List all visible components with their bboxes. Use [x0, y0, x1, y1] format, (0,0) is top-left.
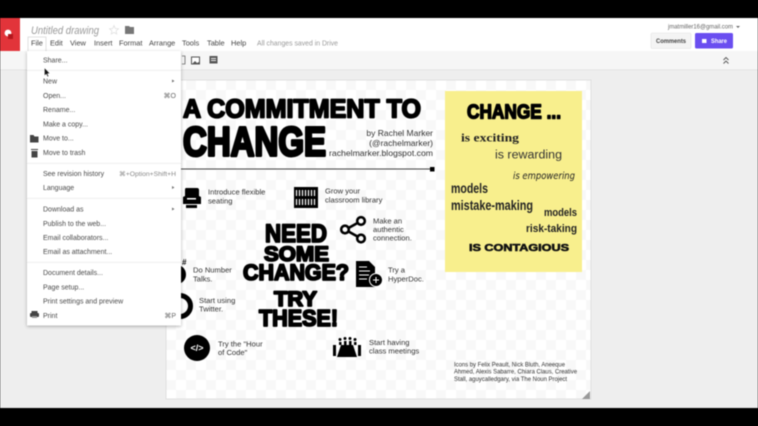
menu bar [28, 37, 338, 52]
panel: change is contagious: CHANGE ... [467, 102, 561, 124]
panel: change is contagious: is rewarding [495, 150, 562, 162]
title: A COMMITMENT TO [183, 96, 421, 124]
menu shortcuts: ⌘+Option+Shift+H [119, 170, 176, 178]
file dropdown menu: Document details... [43, 270, 103, 277]
item: twitter [170, 296, 235, 316]
item: flexible seating: seating [208, 196, 232, 206]
item: classroom library [294, 186, 383, 208]
menu bar: Edit [50, 38, 63, 48]
central heading: THESE! [259, 305, 338, 331]
share button: Share [711, 38, 727, 45]
file dropdown menu: Move to trash [43, 150, 86, 157]
item: flexible seating [183, 188, 265, 208]
title: CHANGE [183, 118, 326, 164]
menu bar: File [31, 38, 43, 48]
icon: image tool [192, 57, 200, 64]
icon: bookshelf [294, 187, 318, 208]
item: hyperdoc: HyperDoc. [388, 274, 424, 284]
icon: printer [30, 311, 39, 318]
byline: by Rachel Marker [366, 128, 433, 138]
menu bar: Format [119, 38, 142, 48]
menu shortcuts [119, 92, 177, 320]
item: classroom library: Grow your [325, 186, 360, 196]
item: number talks: Talks. [193, 274, 212, 284]
icon: comment tool [210, 56, 218, 64]
icon: share nodes [341, 217, 365, 242]
item: twitter: Start using [199, 296, 235, 305]
file dropdown menu: Open... [43, 93, 66, 100]
file dropdown menu: New [43, 78, 58, 86]
item: class meetings: Start having [369, 338, 410, 347]
item: hour of code: Try the "Hour [218, 340, 263, 348]
item: class meetings: class meetings [369, 346, 419, 356]
submenu arrows [172, 80, 174, 210]
icon: document plus [356, 261, 382, 287]
central heading [243, 220, 349, 331]
file dropdown menu: Download as [43, 206, 84, 214]
icon: star [109, 26, 118, 34]
app logo [0, 18, 20, 51]
file dropdown menu: Print settings and preview [43, 298, 124, 306]
icon: number talks: # [182, 258, 187, 267]
icon credits: Icons by Felix Peault, Nick Bluth, Aneeque [454, 361, 565, 368]
item: authentic connection [341, 216, 412, 242]
item: number talks: Do Number [193, 266, 232, 274]
item: authentic connection: authentic [373, 225, 404, 234]
item: number talks [168, 258, 232, 284]
document title: Untitled drawing [31, 25, 100, 37]
item: class meetings [333, 337, 419, 357]
file dropdown menu: Email as attachment... [43, 249, 112, 256]
menu bar: View [70, 38, 87, 48]
item: classroom library: classroom library [325, 196, 383, 204]
icon: twitter ring [170, 296, 190, 316]
panel: change is contagious: models [544, 207, 577, 219]
panel: change is contagious: mistake-making [451, 197, 533, 213]
central heading: TRY [274, 288, 317, 311]
icon: collapse chevrons [724, 58, 728, 64]
panel: change is contagious [445, 91, 582, 272]
drawing page [166, 80, 591, 399]
file dropdown menu: Print [43, 313, 57, 320]
file dropdown menu: Make a copy... [43, 122, 88, 128]
title [183, 96, 421, 164]
icon credits: Ahmed, Alexis Sabarre, Chiara Claus, Creative [454, 368, 577, 376]
account email: jmatmiller16@gmail.com [667, 24, 733, 30]
panel: change is contagious: risk-taking [526, 223, 577, 235]
item: hour of code [184, 335, 263, 361]
file dropdown menu: Rename... [43, 107, 75, 114]
bottom letterbox bar [0, 408, 758, 426]
panel: change is contagious: is empowering [513, 171, 575, 182]
icon credits [454, 361, 577, 383]
item: authentic connection: Make an [373, 216, 402, 226]
icon: folder [30, 135, 38, 142]
icon: trash [31, 149, 38, 158]
item: hour of code: of Code" [218, 348, 248, 357]
central heading: CHANGE? [243, 260, 349, 285]
central heading: SOME [264, 243, 329, 266]
menu bar: Help [231, 38, 246, 48]
menu bar: Arrange [149, 38, 175, 48]
mouse cursor [44, 68, 50, 77]
item: hyperdoc [356, 261, 424, 287]
file dropdown menu: Page setup... [43, 284, 84, 292]
app header [0, 18, 758, 52]
menu bar: Tools [182, 38, 200, 48]
editor background [0, 70, 758, 408]
panel: change is contagious: IS CONTAGIOUS [469, 243, 569, 254]
icon credits: Stall, aguycalledgary, via The Noun Project [454, 376, 567, 383]
file dropdown menu: See revision history [43, 171, 105, 178]
icon: folder [125, 26, 134, 34]
file dropdown menu: Publish to the web... [43, 221, 106, 228]
panel: change is contagious: is exciting [461, 132, 519, 144]
toolbar [0, 51, 758, 70]
comments button: Comments [656, 38, 686, 45]
item: authentic connection: connection. [373, 234, 412, 242]
item: hyperdoc: Try a [388, 266, 406, 274]
icon: code badge: </> [190, 343, 204, 353]
comments button [651, 33, 691, 48]
icon: chair [183, 188, 201, 208]
item: flexible seating: Introduce flexible [208, 188, 265, 196]
icon: meeting table [333, 337, 361, 357]
byline: (@rachelmarker) [369, 138, 433, 148]
item: twitter: Twitter. [199, 304, 223, 314]
file dropdown menu: Language [43, 185, 74, 192]
central heading: NEED [265, 220, 327, 248]
divider with end dot [181, 167, 434, 172]
file dropdown menu: Move to... [43, 136, 74, 142]
share button [695, 33, 733, 48]
icon: text box tool [182, 56, 185, 64]
menu shortcuts: ⌘P [164, 312, 176, 320]
menu bar: Table [207, 38, 225, 48]
byline [329, 128, 433, 158]
file dropdown menu: Email collaborators... [43, 235, 108, 242]
panel: change is contagious: models [451, 180, 488, 196]
menu bar: All changes saved in Drive [257, 38, 338, 48]
menu bar: Insert [94, 38, 112, 48]
resize handle [582, 391, 590, 399]
byline: rachelmarker.blogspot.com [329, 148, 433, 158]
top letterbox bar [0, 0, 758, 18]
file dropdown menu: Share... [43, 58, 68, 64]
file dropdown menu [27, 51, 181, 326]
menu shortcuts: ⌘O [164, 92, 177, 100]
account dropdown arrow [736, 26, 740, 28]
